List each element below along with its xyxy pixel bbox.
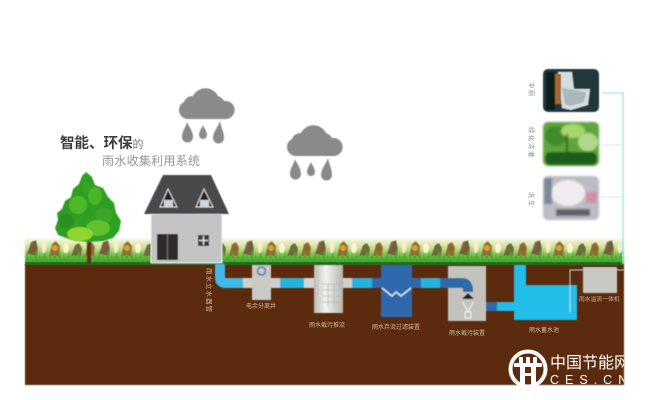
component labels [205, 268, 620, 337]
icon: tree [55, 172, 121, 264]
storage tank [497, 265, 577, 320]
grass and flowers strip [25, 238, 624, 265]
icon: rain cloud left [179, 88, 235, 144]
use labels: 洗车 [527, 192, 535, 208]
title [60, 134, 200, 168]
pipe system [220, 264, 624, 321]
icon: logo circle [510, 352, 546, 386]
photo: green plants [543, 122, 599, 166]
all-in-one treatment unit [583, 267, 617, 293]
photo: toilet [543, 69, 599, 112]
component labels: 雨水弃流过滤装置 [372, 323, 420, 331]
use labels: 绿化浇灌 [527, 127, 535, 159]
icon: house [144, 175, 229, 263]
inspection well [243, 265, 280, 300]
title: 雨水收集利用系统 [102, 153, 200, 168]
pipe segment [280, 278, 304, 288]
component labels: 电余分离井 [246, 302, 276, 310]
pipe: downspout [220, 264, 243, 283]
use labels [527, 82, 535, 208]
component labels: 雨水截污推流 [309, 321, 345, 329]
ground [25, 264, 624, 385]
title: 智能、环保的 [60, 134, 144, 152]
settling tank [314, 265, 343, 313]
icon: rain cloud right [287, 125, 343, 181]
interception gate well [440, 266, 486, 321]
watermark logo [510, 352, 633, 387]
watermark logo: CES.CN [550, 373, 633, 387]
component labels: 雨水溢流一体机 [579, 295, 620, 303]
photo: car wash [543, 176, 599, 220]
watermark logo: 中国节能网 [550, 354, 630, 372]
use labels: 冲厕 [527, 82, 535, 98]
supply lines [600, 93, 623, 264]
filter device [381, 265, 412, 317]
component labels: 雨水截污装置 [449, 329, 485, 337]
component labels: 雨水蓄水池 [529, 326, 559, 334]
component labels: 雨水立水器管 [205, 268, 214, 313]
pump line [570, 270, 583, 312]
